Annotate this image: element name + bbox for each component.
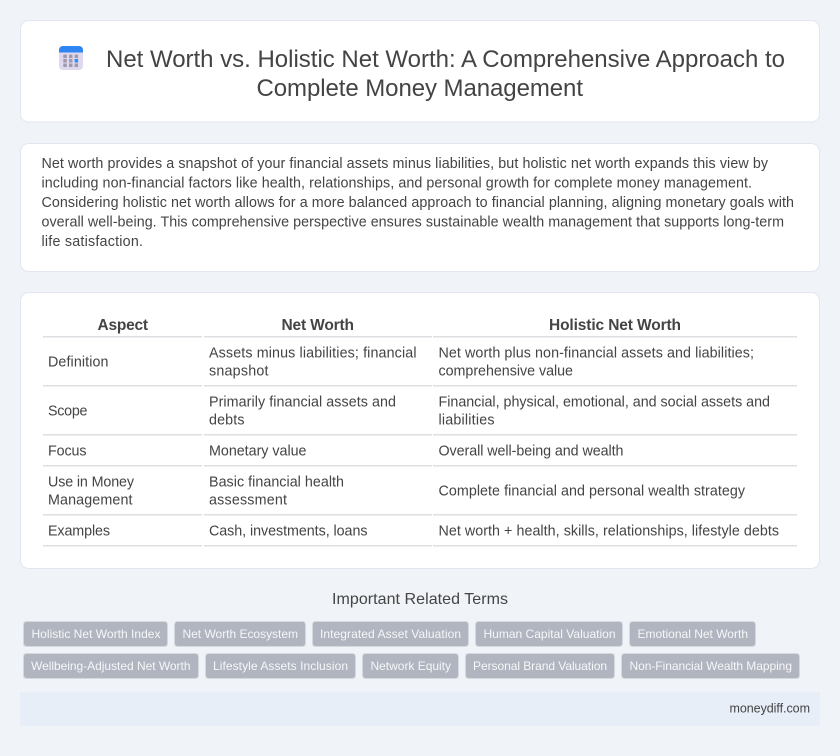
table header row: Aspect	[98, 317, 148, 334]
row: focus	[48, 444, 624, 460]
tag	[476, 622, 622, 646]
tag	[312, 622, 468, 646]
title: Net Worth vs. Holistic Net Worth: A Comprehensive Approach to	[106, 46, 785, 73]
text block: introduction: Considering holistic net worth allows for a more balanced approach to financial planning, aligning monetary goals with	[42, 195, 794, 211]
row: use in money management: Basic financial health	[209, 474, 344, 490]
row: definition	[48, 346, 754, 380]
row: use in money management: Use in Money	[48, 474, 135, 490]
tag: Integrated Asset Valuation	[320, 627, 461, 641]
text block: introduction: Net worth provides a snapshot of your financial assets minus liabilities, but holistic net worth expands this view by	[42, 156, 769, 172]
tag	[622, 654, 800, 678]
tag: Network Equity	[370, 659, 451, 673]
tag	[24, 654, 198, 678]
tag: Human Capital Valuation	[484, 627, 616, 641]
row: use in money management	[48, 474, 746, 508]
tag: Personal Brand Valuation	[473, 659, 607, 673]
title: Complete Money Management	[256, 75, 583, 102]
tag	[362, 654, 458, 678]
tag	[24, 622, 168, 646]
row: scope: Scope	[48, 404, 88, 420]
tag: Net Worth Ecosystem	[182, 627, 298, 641]
icon: calendar	[59, 46, 83, 70]
row: definition: snapshot	[209, 364, 269, 380]
title	[106, 46, 785, 102]
row: examples	[48, 524, 779, 540]
tag group: related terms	[24, 622, 800, 678]
tag: Wellbeing-Adjusted Net Worth	[31, 659, 190, 673]
tag	[174, 622, 306, 646]
table header row: Net Worth	[282, 317, 354, 334]
tag	[466, 654, 614, 678]
panel: comparison table	[20, 292, 820, 568]
text block: introduction: including non-financial factors like health, relationships, and personal growth for complete money management.	[42, 176, 752, 192]
footer: moneydiff.com	[730, 702, 810, 716]
row: scope: debts	[209, 412, 244, 428]
panel: header	[20, 20, 820, 122]
panel: introduction text	[20, 144, 820, 272]
heading: important related terms: Important Related Terms	[332, 591, 508, 608]
text block: introduction	[42, 156, 794, 250]
row: scope	[48, 394, 770, 428]
row: definition: Net worth plus non-financial assets and liabilities;	[438, 346, 754, 362]
row: focus: Overall well-being and wealth	[438, 444, 624, 460]
row: scope: liabilities	[438, 412, 494, 428]
text block: introduction: life satisfaction.	[42, 234, 143, 250]
row: scope: Primarily financial assets and	[209, 394, 396, 410]
tag: Lifestyle Assets Inclusion	[213, 659, 348, 673]
row: definition: comprehensive value	[438, 364, 573, 380]
tag: Emotional Net Worth	[638, 627, 748, 641]
text block: introduction: overall well-being. This comprehensive perspective ensures sustainable wealth management that supports long-term	[42, 214, 784, 230]
tag	[206, 654, 356, 678]
tag: Non-Financial Wealth Mapping	[630, 659, 792, 673]
row: scope: Financial, physical, emotional, and social assets and	[438, 394, 770, 410]
row: examples: Cash, investments, loans	[209, 524, 368, 540]
row: use in money management: Complete financial and personal wealth strategy	[438, 484, 746, 500]
tag	[630, 622, 756, 646]
row: definition: Assets minus liabilities; financial	[209, 346, 416, 362]
footer	[20, 692, 820, 726]
row: use in money management: Management	[48, 492, 133, 508]
table header row: Holistic Net Worth	[549, 317, 681, 334]
row: examples: Net worth + health, skills, relationships, lifestyle debts	[438, 524, 779, 540]
table header row	[98, 317, 681, 334]
row: definition: Definition	[48, 354, 109, 370]
row: use in money management: assessment	[209, 492, 287, 508]
row: focus: Focus	[48, 444, 86, 460]
row: focus: Monetary value	[209, 444, 307, 460]
row: examples: Examples	[48, 524, 110, 540]
tag: Holistic Net Worth Index	[32, 627, 160, 641]
